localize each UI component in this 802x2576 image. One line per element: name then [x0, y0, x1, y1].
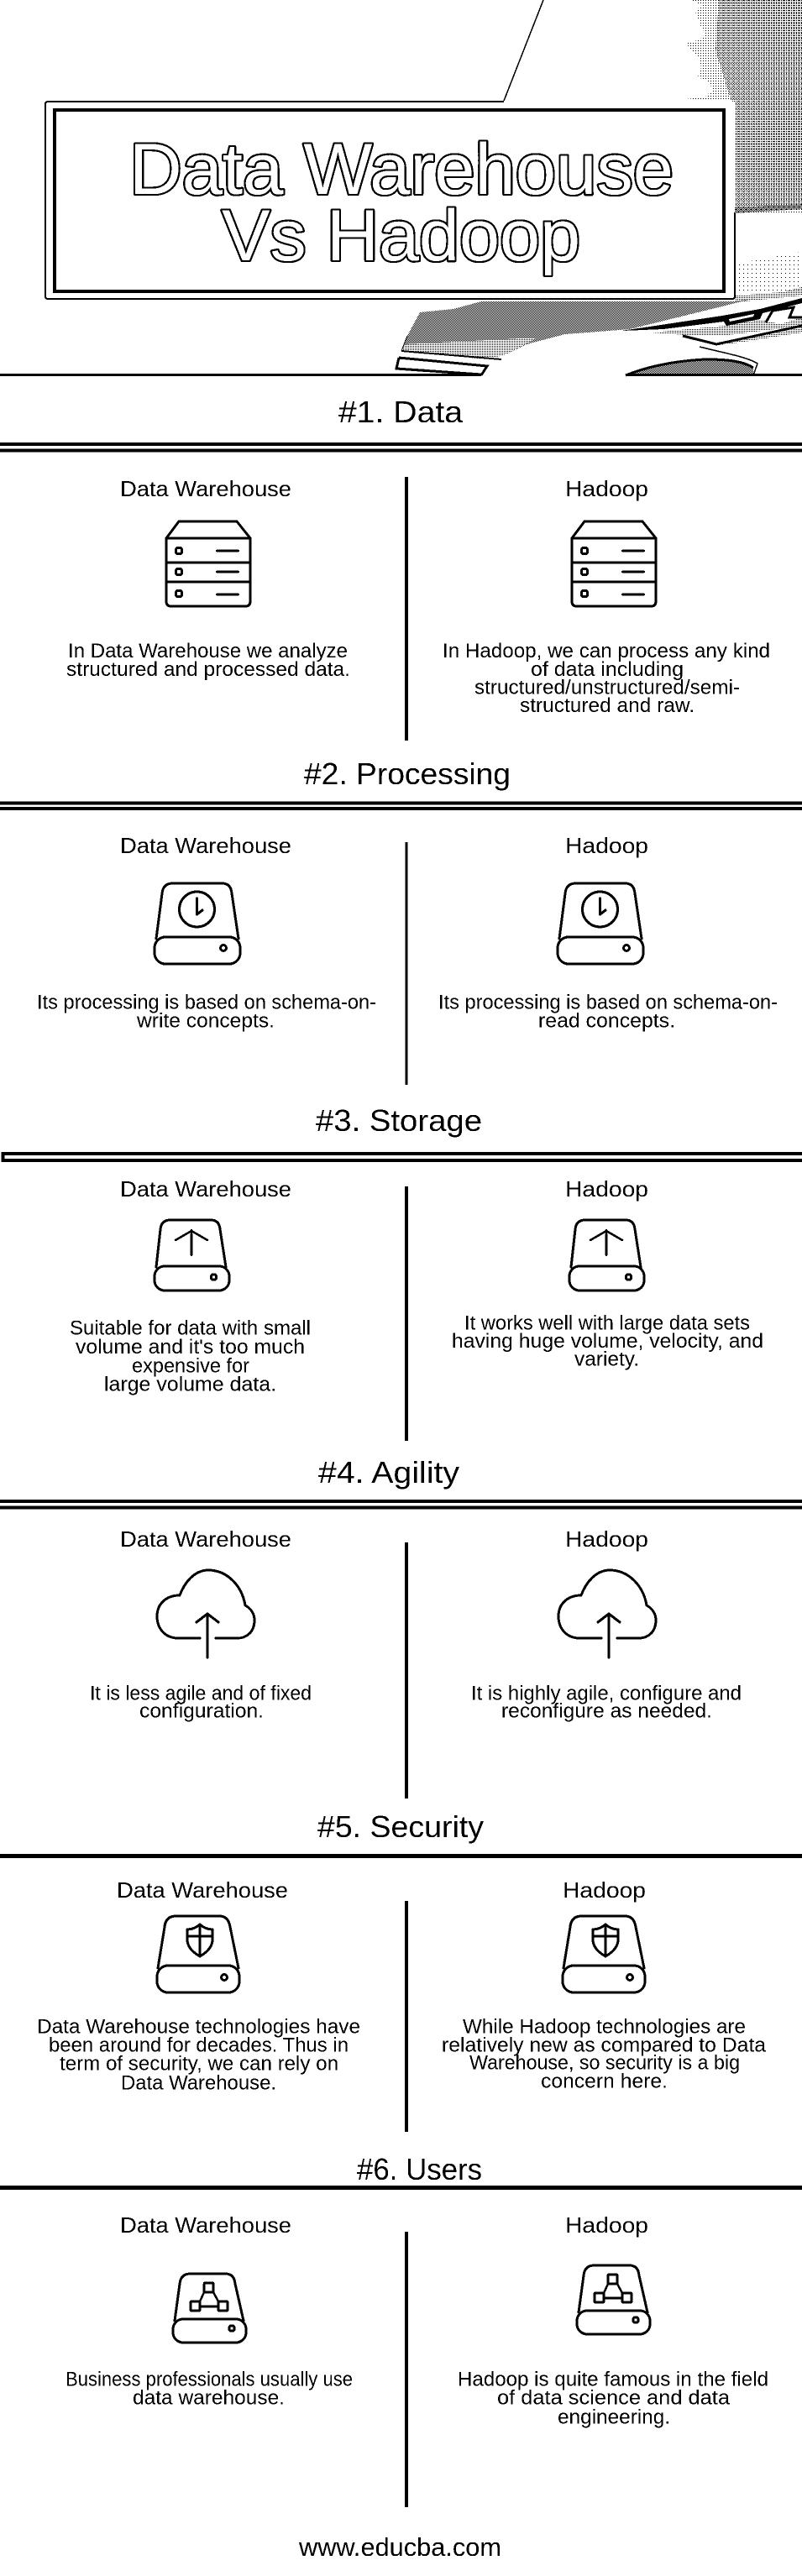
column: Data Warehouse: Data Warehouse	[117, 1877, 288, 1903]
column: Data Warehouse	[70, 1176, 311, 1395]
body text: Data Warehouse.	[121, 2072, 276, 2094]
column: Hadoop: Hadoop	[565, 833, 648, 858]
icon: drive with upload arrow	[569, 1220, 644, 1291]
double rule	[0, 1501, 802, 1508]
icon: cloud upload	[558, 1570, 656, 1657]
panel: #3 Storage	[3, 1103, 802, 1441]
column divider	[405, 2232, 408, 2507]
body text: of data science and data	[497, 2386, 731, 2410]
panel: #4 Agility	[0, 1455, 802, 1798]
body text: Warehouse, so security is a big	[469, 2052, 740, 2074]
body text	[443, 640, 770, 717]
column: Data Warehouse	[66, 476, 350, 681]
hero: laptop and mouse outlines	[396, 298, 802, 375]
heading: #6. Users: #6. Users	[357, 2152, 482, 2186]
body text: data warehouse.	[133, 2386, 285, 2410]
body text	[452, 1312, 763, 1370]
column divider	[405, 842, 408, 1085]
body text: large volume data.	[104, 1374, 276, 1395]
hero rule	[0, 374, 802, 376]
body text: Its processing is based on schema-on-	[438, 991, 778, 1014]
heading: #4. Agility: #4. Agility	[318, 1455, 459, 1490]
body text: It is highly agile, configure and	[471, 1683, 742, 1704]
body text: term of security, we can rely on	[60, 2052, 338, 2076]
column divider	[405, 477, 408, 741]
icon: cloud upload	[157, 1570, 254, 1657]
body text	[66, 2368, 353, 2410]
column: Data Warehouse: Data Warehouse	[120, 1526, 291, 1552]
heading: #3. Storage: #3. Storage	[316, 1103, 482, 1138]
column divider	[405, 1901, 408, 2132]
thick rule	[0, 1854, 802, 1858]
body text	[66, 640, 350, 681]
heading: #2. Processing: #2. Processing	[304, 757, 511, 791]
column: Hadoop: Hadoop	[565, 1176, 648, 1202]
body text	[438, 991, 778, 1033]
body text: It works well with large data sets	[464, 1312, 750, 1335]
body text: It is less agile and of fixed	[90, 1683, 312, 1704]
column divider	[405, 1542, 408, 1798]
column: Hadoop: Hadoop	[565, 1526, 648, 1552]
column: Data Warehouse: Data Warehouse	[120, 833, 291, 858]
title text: Data Warehouse	[129, 129, 674, 210]
column: Data Warehouse	[90, 1526, 312, 1723]
icon: drive with shield	[563, 1916, 645, 1992]
column: Hadoop: Hadoop	[563, 1877, 646, 1903]
icon: server rack	[166, 521, 250, 606]
body text: been around for decades. Thus in	[49, 2034, 349, 2057]
column: Hadoop: Hadoop	[565, 476, 648, 501]
double rule	[0, 444, 802, 450]
body text	[90, 1683, 312, 1723]
icon: drive with upload arrow	[155, 1220, 229, 1291]
icon: drive with network	[173, 2274, 246, 2343]
body text: Data Warehouse technologies have	[37, 2015, 360, 2039]
body text: concern here.	[541, 2071, 668, 2092]
body text	[70, 1317, 311, 1395]
hero: laptop and desk photo background	[401, 0, 802, 375]
footer website: www.educba.com	[298, 2532, 501, 2562]
body text	[37, 2015, 360, 2094]
heading: #5. Security: #5. Security	[317, 1809, 484, 1844]
body text: structured/unstructured/semi-	[474, 677, 740, 699]
double rule	[0, 803, 802, 809]
body text: While Hadoop technologies are	[463, 2015, 746, 2039]
title text: Vs Hadoop	[222, 196, 580, 276]
column: Data Warehouse	[37, 833, 376, 1033]
column: Data Warehouse: Data Warehouse	[120, 2212, 291, 2238]
body text: read concepts.	[538, 1009, 675, 1033]
diagonal accent line	[504, 0, 543, 101]
double rule	[3, 1154, 802, 1160]
column: Hadoop	[471, 1526, 742, 1723]
icon: drive with clock	[155, 883, 240, 964]
column: Data Warehouse	[37, 1877, 360, 2094]
body text: engineering.	[558, 2406, 670, 2428]
body text: structured and processed data.	[66, 658, 350, 681]
icon: drive with shield	[157, 1916, 239, 1992]
body text: Suitable for data with small	[70, 1317, 311, 1340]
column: Data Warehouse	[66, 2212, 353, 2410]
panel: #5 Security	[0, 1809, 802, 2132]
column: Hadoop	[452, 1176, 763, 1370]
body text: In Hadoop, we can process any kind	[443, 640, 770, 662]
panel: #6 Users	[0, 2152, 802, 2507]
panel: #2 Processing	[0, 757, 802, 1085]
body text: variety.	[574, 1348, 639, 1370]
heading: #1. Data: #1. Data	[338, 395, 464, 429]
body text: expensive for	[132, 1355, 249, 1377]
icon: server rack	[572, 521, 656, 606]
body text: Its processing is based on schema-on-	[37, 991, 376, 1014]
body text: configuration.	[139, 1699, 264, 1723]
icon: drive with network	[577, 2265, 650, 2334]
body text: having huge volume, velocity, and	[452, 1330, 763, 1353]
column: Hadoop	[458, 2212, 768, 2428]
body text	[471, 1683, 742, 1723]
body text: In Data Warehouse we analyze	[68, 640, 348, 662]
body text: structured and raw.	[520, 694, 695, 717]
body text: of data including	[531, 658, 684, 681]
body text: write concepts.	[136, 1009, 275, 1033]
column: Data Warehouse: Data Warehouse	[120, 476, 291, 501]
body text: relatively new as compared to Data	[442, 2034, 767, 2057]
body text	[458, 2368, 768, 2428]
body text	[37, 991, 376, 1033]
title panel	[45, 102, 735, 299]
column divider	[405, 1186, 408, 1441]
panel: #1 Data	[0, 395, 802, 741]
title text	[129, 129, 674, 276]
icon: drive with clock	[558, 883, 643, 964]
column: Data Warehouse: Data Warehouse	[120, 1176, 291, 1202]
body text: volume and it's too much	[76, 1336, 305, 1359]
body text: Hadoop is quite famous in the field	[458, 2368, 768, 2391]
body text	[442, 2015, 767, 2092]
thick rule	[0, 2186, 802, 2190]
column: Hadoop	[443, 476, 770, 717]
body text: reconfigure as needed.	[501, 1699, 712, 1723]
body text: Business professionals usually use	[66, 2368, 353, 2391]
column: Hadoop	[438, 833, 778, 1033]
column: Hadoop	[442, 1877, 767, 2092]
column: Hadoop: Hadoop	[565, 2212, 648, 2238]
